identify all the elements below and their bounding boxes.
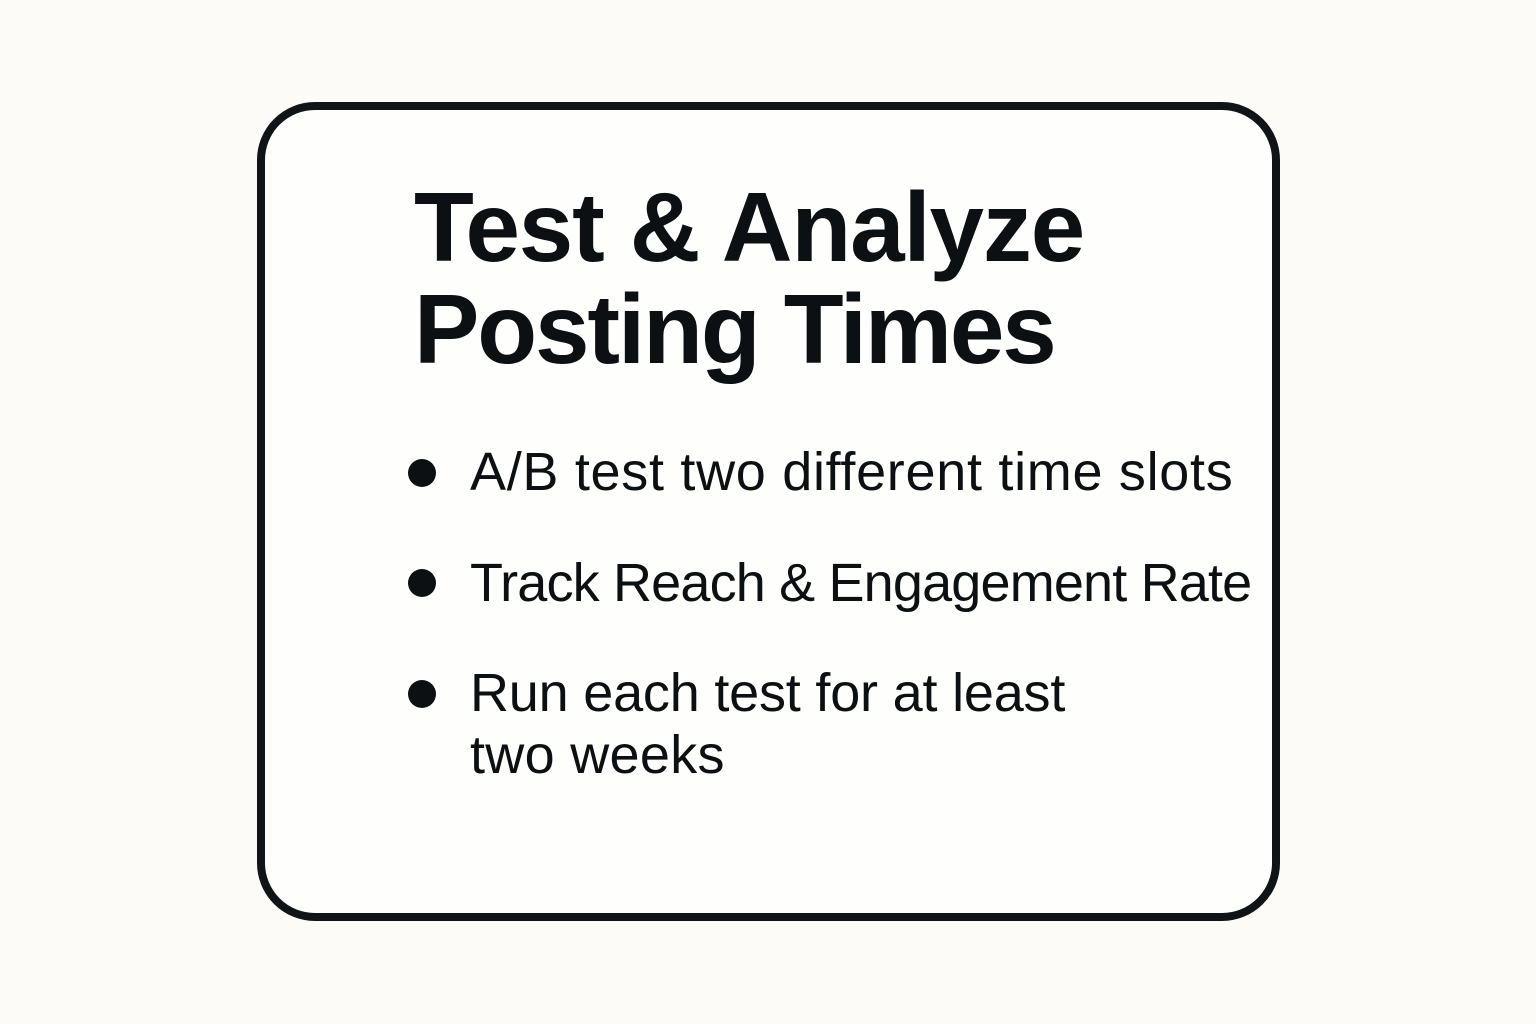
title (414, 172, 1084, 384)
bullet 3 text: Run each test for at least (470, 663, 1065, 723)
panel: card (257, 102, 1280, 921)
bullet 2 marker (408, 569, 436, 597)
bullet 3 marker (408, 680, 436, 708)
bullet 3 text (470, 663, 1065, 785)
bullet 3 text: two weeks (470, 725, 725, 785)
bullet 1 marker (408, 459, 436, 487)
title: Test & Analyze (414, 172, 1084, 282)
bullet 1 text: A/B test two different time slots (470, 442, 1233, 502)
bullet 2 text: Track Reach & Engagement Rate (470, 553, 1251, 613)
title: Posting Times (414, 274, 1055, 384)
